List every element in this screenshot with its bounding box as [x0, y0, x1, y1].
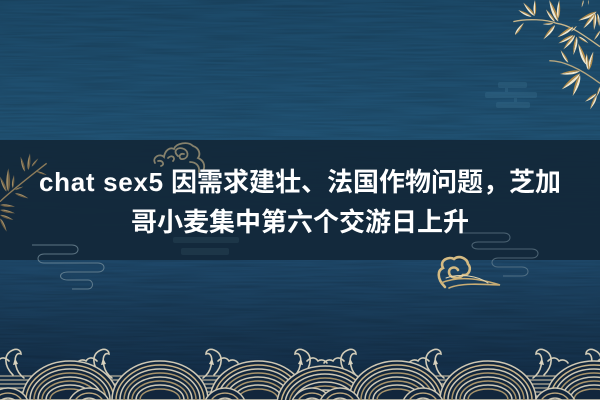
icon: scroll cloud on band: [154, 143, 204, 172]
title: 哥小麦集中第六个交游日上升: [131, 207, 469, 237]
icon: gold cloud: [439, 257, 500, 288]
line cloud left: [32, 245, 104, 289]
line cloud right: [463, 233, 538, 276]
large wave arcs: [22, 361, 600, 400]
icon: golden bamboo top right: [513, 0, 600, 110]
icon: muted bamboo left: [0, 153, 47, 232]
title: [39, 167, 561, 237]
title: chat sex5 因需求建壮、法国作物问题，芝加: [39, 167, 561, 197]
dark title band: [0, 140, 600, 260]
faint band mark: [173, 237, 239, 255]
faint seal mark top right: [485, 82, 537, 108]
wave strands: [0, 376, 585, 396]
small wave arcs: [0, 388, 575, 400]
waves border: [0, 349, 600, 400]
wave crests: [0, 349, 600, 378]
